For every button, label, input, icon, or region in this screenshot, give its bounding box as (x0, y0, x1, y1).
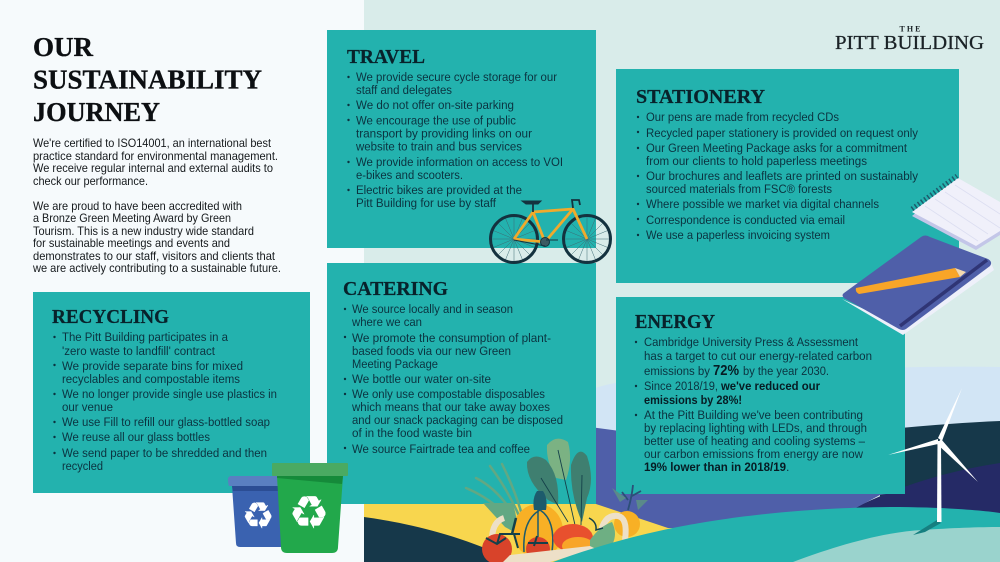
list: catering items: We bottle our water on-site (352, 372, 491, 386)
list: recycling items: We provide separate bins for mixed (62, 359, 243, 373)
list: catering items: We source Fairtrade tea and coffee (352, 442, 530, 456)
title: JOURNEY (33, 96, 160, 127)
list: travel items: staff and delegates (356, 83, 452, 97)
front wheel (563, 215, 611, 263)
intro text: green meeting award: Tourism. This is a new industry wide standard (33, 224, 254, 238)
list: travel items: We provide secure cycle storage for our (356, 70, 557, 84)
list: recycling items: our venue (62, 400, 113, 414)
saddle and handlebar (533, 200, 580, 212)
list: travel items (347, 70, 563, 210)
pencil (856, 268, 966, 294)
list: recycling items: We use Fill to refill our glass-bottled soap (62, 415, 270, 429)
icon: spiral notepad (912, 176, 1000, 250)
heading: recycling: RECYCLING (52, 306, 169, 328)
logo: the pitt building (835, 24, 984, 54)
heading: stationery: STATIONERY (636, 86, 765, 108)
frame (514, 209, 587, 242)
list: recycling items: We send paper to be shredded and then (62, 446, 267, 460)
intro text: certification: practice standard for environmental management. (33, 149, 278, 163)
list: recycling items: We reuse all our glass bottles (62, 430, 210, 444)
logo: the pitt building: THE (900, 24, 920, 34)
list: travel items: We provide information on access to VOI (356, 155, 563, 169)
intro text: green meeting award (32, 199, 281, 275)
pumpkin (513, 504, 563, 558)
background landscape (364, 0, 1000, 562)
list: energy items: by the year 2030. (743, 364, 829, 378)
list: energy items: 19% lower than in 2018/19 (644, 460, 786, 474)
list: energy items: by replacing lighting with LEDs, and through (644, 421, 867, 435)
foreground hill: teal (553, 507, 1000, 562)
large leaves (547, 439, 570, 480)
list: catering items: We only use compostable disposables (352, 387, 545, 401)
intro text: green meeting award: We are proud to have been accredited with (33, 199, 242, 213)
red pepper (553, 524, 593, 552)
list: recycling items: recyclables and compostable items (62, 372, 240, 386)
list: stationery items: Where possible we market via digital channels (646, 197, 879, 211)
list: travel items: We encourage the use of public (356, 114, 516, 128)
logo: the pitt building: PITT BUILDING (835, 33, 984, 54)
panel: stationery (616, 69, 959, 283)
list: energy items: emissions by (644, 364, 711, 378)
list: recycling items: 'zero waste to landfill' contract (62, 344, 216, 358)
cream basket handles (492, 518, 504, 540)
intro text: green meeting award: a Bronze Green Meeting Award by Green (33, 211, 231, 225)
icon: bicycle (490, 200, 611, 263)
rear wheel (490, 215, 538, 263)
green pepper (590, 522, 615, 550)
tomatoes (482, 534, 512, 562)
list: energy items: 72% (713, 362, 739, 379)
list: stationery items (637, 110, 919, 242)
heading: travel: TRAVEL (347, 46, 425, 68)
list: catering items: We source locally and in season (352, 302, 513, 316)
list: stationery items: We use a paperless invoicing system (646, 228, 830, 242)
list: energy items: has a target to cut our energy-related carbon (644, 349, 872, 363)
list: stationery items: from our clients to hold paperless meetings (646, 154, 867, 168)
panel: energy (616, 297, 905, 494)
list: recycling items: recycled (62, 459, 103, 473)
icon: wind turbine (888, 388, 978, 535)
intro text: green meeting award: demonstrates to our staff, visitors and clients that (33, 249, 276, 263)
heading: catering: CATERING (343, 278, 448, 300)
list: travel items: transport by providing links on our (356, 126, 532, 140)
list: catering items: Meeting Package (352, 357, 438, 371)
list: recycling items (53, 330, 277, 473)
list: energy items: better use of heating and cooling systems – (644, 434, 865, 448)
list: energy items: we've reduced our (720, 379, 820, 393)
title: OUR (33, 31, 94, 62)
icon: blue notebook (842, 236, 994, 335)
list: energy items: . (786, 460, 789, 474)
list: catering items: of in the food waste bin (352, 426, 472, 440)
basket slat (503, 546, 596, 562)
list: catering items: based foods via our new Green (352, 344, 511, 358)
list: travel items: Pitt Building for use by staff (356, 196, 497, 210)
list: stationery items: Our brochures and leaflets are printed on sustainably (646, 169, 919, 183)
panel: travel (327, 30, 596, 248)
grass leaves (466, 464, 522, 526)
intro text: certification: check our performance. (33, 174, 148, 188)
list: energy items: At the Pitt Building we've been contributing (644, 408, 863, 422)
intro text: certification (33, 136, 278, 188)
carrot tops (622, 485, 641, 510)
intro text: green meeting award: for sustainable meetings and events and (33, 236, 230, 250)
title: SUSTAINABILITY (33, 64, 262, 94)
list: stationery items: Our pens are made from recycled CDs (646, 110, 839, 124)
list: travel items: Electric bikes are provided at the (356, 183, 522, 197)
foreground hill: pale teal (793, 527, 1000, 562)
list: energy items: Cambridge University Press & Assessment (644, 335, 859, 349)
intro text: green meeting award: we are actively contributing to a sustainable future. (32, 261, 281, 275)
heading: energy: ENERGY (635, 311, 715, 333)
list: catering items: We promote the consumption of plant- (352, 331, 551, 345)
list: travel items: website to train and bus services (355, 140, 522, 154)
list: catering items (344, 302, 563, 456)
list: stationery items: sourced materials from FSC® forests (646, 182, 832, 196)
icon: green recycling bin (272, 463, 348, 553)
list: energy items: our carbon emissions from energy are now (644, 447, 863, 461)
list: energy items (635, 335, 872, 474)
list: travel items: We do not offer on-site parking (356, 98, 514, 112)
list: catering items: which means that our take away boxes (351, 400, 550, 414)
panel: catering (327, 263, 596, 504)
title (33, 31, 262, 127)
icon: blue recycling bin: ♻ (242, 496, 274, 537)
list: recycling items: We no longer provide single use plastics in (62, 387, 277, 401)
icon: green recycling bin: ♻ (289, 486, 329, 539)
list: energy items: Since 2018/19, (644, 379, 718, 393)
list: catering items: where we can (351, 315, 422, 329)
list: travel items: e-bikes and scooters. (356, 168, 463, 182)
list: catering items: and our snack packaging can be disposed (352, 413, 563, 427)
intro text: certification: We receive regular internal and external audits to (33, 161, 273, 175)
icon: blue recycling bin (228, 476, 281, 547)
list: recycling items: The Pitt Building participates in a (62, 330, 228, 344)
list: stationery items: Our Green Meeting Package asks for a commitment (646, 141, 908, 155)
list: energy items: emissions by 28%! (644, 393, 742, 407)
list: stationery items: Correspondence is conducted via email (646, 213, 845, 227)
panel: recycling (33, 292, 310, 493)
list: stationery items: Recycled paper stationery is provided on request only (646, 126, 919, 140)
intro text: certification: We're certified to ISO14001, an international best (33, 136, 272, 150)
illustration: vegetables (466, 439, 648, 562)
